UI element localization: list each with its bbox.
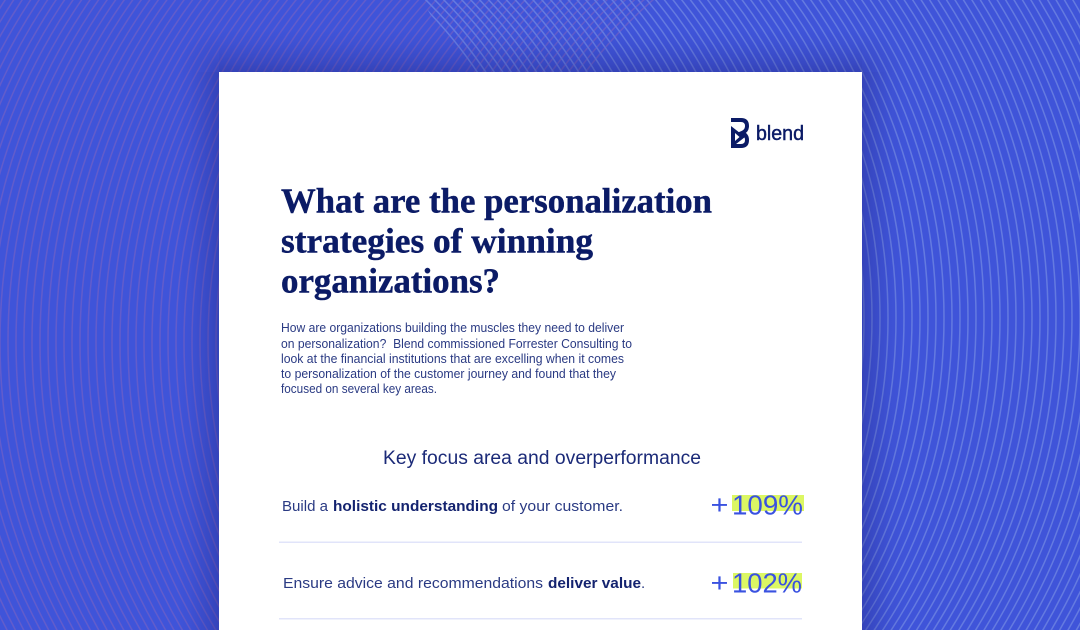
row 2 label: Ensure advice and recommendations [283,575,543,592]
row 2 label: . [641,575,645,592]
title: organizations? [281,262,500,300]
row 2 value: +102%: 102% [732,568,802,598]
row 1 label: of your customer. [502,498,623,515]
intro paragraph: on personalization? Blend commissioned Forrester Consulting to [281,337,632,351]
row 1 label: holistic understanding [333,498,498,515]
section heading: Key focus area and overperformance [383,448,701,469]
panel: white document card [219,72,862,630]
intro paragraph: focused on several key areas. [281,382,437,396]
row 1 value: +109%: 109% [732,490,803,520]
intro paragraph: How are organizations building the muscles they need to deliver [281,321,624,335]
logo: blend [731,120,804,148]
row 2: deliver value [283,568,802,598]
row 1 label [282,498,623,515]
row 1 label: Build a [282,498,329,515]
icon: blend B mark [731,120,747,148]
title [281,182,712,300]
row 2 label [283,575,645,592]
intro paragraph [281,321,632,396]
row 1: holistic understanding [282,490,804,520]
intro paragraph: look at the financial institutions that are excelling when it comes [281,352,624,366]
row 2 label: deliver value [548,575,641,592]
row 2 value: +102%: + [710,568,728,598]
title: strategies of winning [281,222,594,260]
intro paragraph: to personalization of the customer journey and found that they [281,367,617,381]
title: What are the personalization [281,182,712,220]
logo wordmark: blend [756,123,804,145]
row 1 value: +109%: + [710,490,728,520]
